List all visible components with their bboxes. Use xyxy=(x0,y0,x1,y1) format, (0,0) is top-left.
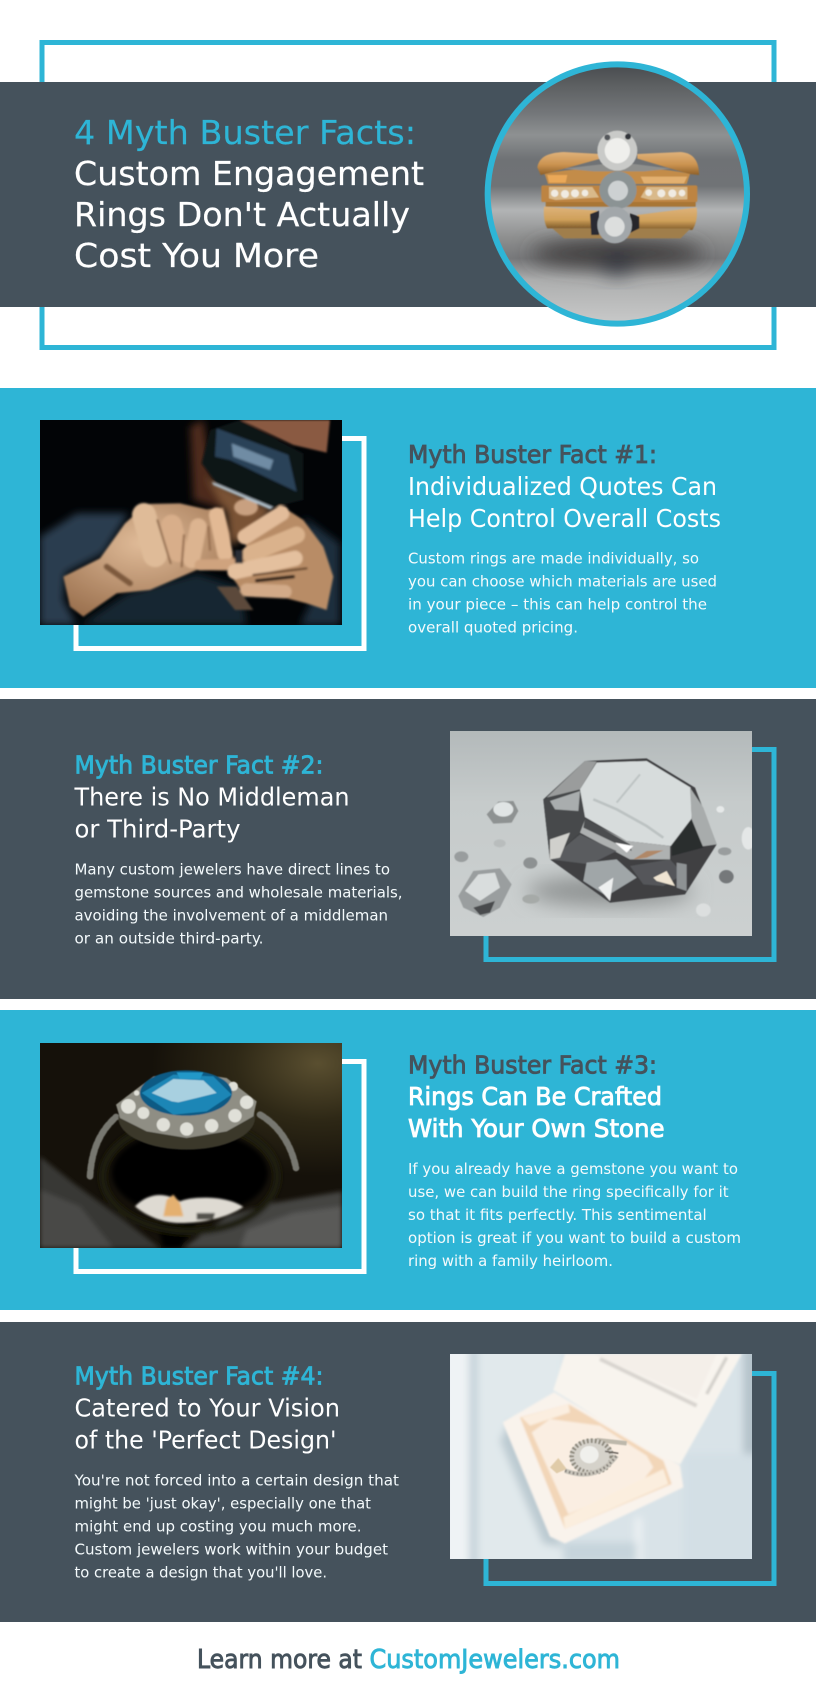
photo: blue gemstone ring xyxy=(40,1043,342,1248)
section 3 text: so that it fits perfectly. This sentimental xyxy=(408,1206,707,1224)
section 2 frame xyxy=(486,750,774,960)
section 3 text: option is great if you want to build a custom xyxy=(408,1229,741,1247)
section 3 text: use, we can build the ring specifically for it xyxy=(408,1183,729,1201)
section 4 text: might be 'just okay', especially one that xyxy=(74,1494,371,1512)
section 4 text: You're not forced into a certain design that xyxy=(74,1471,399,1489)
ring xyxy=(550,1458,567,1473)
bottom band xyxy=(544,207,597,228)
section 1 text: Individualized Quotes Can xyxy=(408,472,717,501)
middle band xyxy=(541,185,697,202)
section 4 text: might end up costing you much more. xyxy=(74,1517,362,1535)
section 4 text: to create a design that you'll love. xyxy=(74,1563,327,1581)
box base xyxy=(503,1392,683,1543)
photo: large cut diamond xyxy=(450,731,752,936)
section 4 frame xyxy=(486,1374,774,1584)
left hand xyxy=(63,503,237,617)
footer call to action: CustomJewelers.com xyxy=(370,1645,620,1675)
section 2 background xyxy=(0,699,816,999)
section 4 background xyxy=(0,1322,816,1622)
section 1 text: you can choose which materials are used xyxy=(408,572,717,590)
section 3 text: Myth Buster Fact #3: xyxy=(408,1051,657,1080)
header band xyxy=(0,82,816,307)
section 1 text: in your piece – this can help control the xyxy=(408,595,707,613)
section 2 text: gemstone sources and wholesale materials, xyxy=(74,883,402,901)
section 3 background xyxy=(0,1010,816,1310)
section 3 text: Rings Can Be Crafted xyxy=(408,1082,662,1111)
section 4 text xyxy=(74,1362,399,1581)
section 4 text: of the 'Perfect Design' xyxy=(74,1425,336,1454)
section 4 text: Catered to Your Vision xyxy=(74,1394,340,1423)
right hand xyxy=(228,505,333,610)
section 1 text: Help Control Overall Costs xyxy=(408,504,721,533)
title: 4 Myth Buster Facts: xyxy=(74,113,416,152)
section 1 text: overall quoted pricing. xyxy=(408,618,578,636)
section 2 text xyxy=(74,750,403,947)
title xyxy=(74,113,424,275)
section 4 text: Myth Buster Fact #4: xyxy=(74,1362,324,1391)
top band xyxy=(537,152,601,175)
title: Cost You More xyxy=(74,236,319,275)
lid xyxy=(553,1354,742,1465)
section 3 text: With Your Own Stone xyxy=(408,1114,665,1143)
section 2 text: Many custom jewelers have direct lines to xyxy=(74,860,390,878)
section 2 text: There is No Middleman xyxy=(74,783,350,812)
section 1 text xyxy=(408,440,721,636)
section 2 text: or Third-Party xyxy=(74,814,241,843)
footer call to action xyxy=(197,1645,620,1675)
section 3 text: ring with a family heirloom. xyxy=(408,1252,613,1270)
section 1 frame xyxy=(76,438,364,648)
section 4 text: Custom jewelers work within your budget xyxy=(74,1540,388,1558)
section 2 text: avoiding the involvement of a middleman xyxy=(74,906,388,924)
footer call to action: Learn more at xyxy=(197,1645,362,1675)
section 2 text: Myth Buster Fact #2: xyxy=(74,750,324,779)
title: Custom Engagement xyxy=(74,154,424,193)
section 2 text: or an outside third-party. xyxy=(74,929,264,947)
title: Rings Don't Actually xyxy=(74,195,410,234)
header frame xyxy=(42,42,774,348)
section 3 text: If you already have a gemstone you want to xyxy=(408,1160,738,1178)
photo: jeweler's hands with loupe xyxy=(40,420,342,625)
section 1 background xyxy=(0,388,816,688)
section 3 text xyxy=(408,1051,741,1270)
photo: stacked gold rings in circle xyxy=(484,61,750,327)
section 1 text: Custom rings are made individually, so xyxy=(408,549,699,567)
section 3 frame xyxy=(76,1062,364,1272)
small gems xyxy=(487,801,518,824)
section 1 text: Myth Buster Fact #1: xyxy=(408,440,657,469)
diamonds xyxy=(590,211,599,235)
photo: ring in velvet box xyxy=(450,1354,752,1559)
